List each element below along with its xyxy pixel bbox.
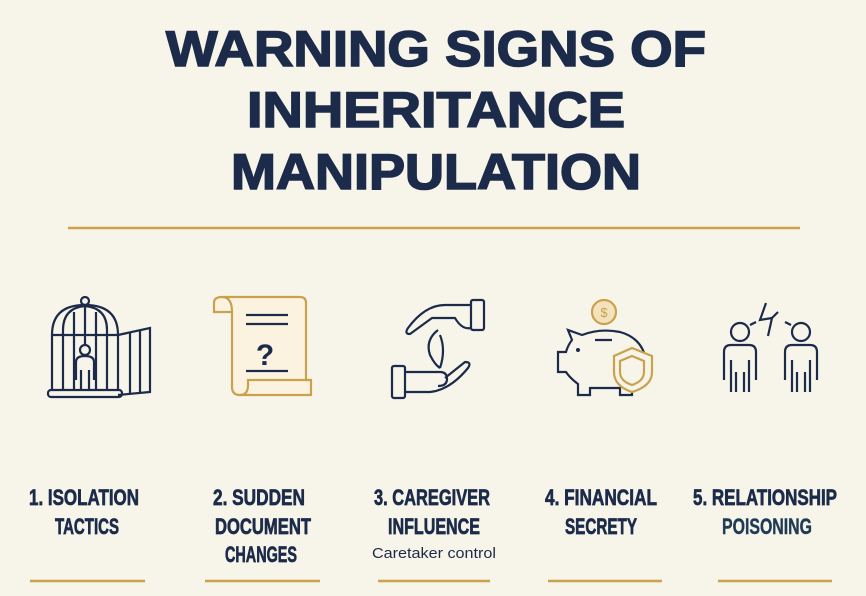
label 3: Caretaker control — [372, 545, 496, 562]
icon: scroll with question mark — [214, 297, 311, 395]
labels — [29, 485, 837, 567]
title: WARNING SIGNS OF — [166, 21, 706, 77]
label 4: 4. FINANCIAL — [545, 485, 657, 510]
label 5: POISONING — [722, 514, 812, 539]
label 2 — [213, 485, 311, 567]
icon: birdcage — [48, 297, 150, 397]
icon: hands exchanging — [392, 300, 484, 398]
label 2: 2. SUDDEN — [213, 485, 305, 510]
label 2: CHANGES — [225, 542, 297, 567]
label 3: INFLUENCE — [388, 514, 480, 539]
icon: piggy bank with shield — [558, 300, 652, 395]
label 2: DOCUMENT — [215, 514, 311, 539]
label 1: TACTICS — [55, 514, 119, 539]
label 3: 3. CAREGIVER — [374, 485, 490, 510]
label 3 — [372, 485, 496, 562]
icon: two people conflict — [724, 303, 817, 392]
title: INHERITANCE — [247, 82, 625, 138]
label 1 — [29, 485, 139, 539]
label 4: SECRETY — [565, 514, 637, 539]
label 4 — [545, 485, 657, 539]
icon: piggy bank with shield: $ — [600, 305, 608, 320]
icon: scroll with question mark: ? — [256, 339, 274, 372]
title — [166, 21, 706, 200]
title: MANIPULATION — [231, 144, 641, 200]
label 5 — [693, 485, 837, 539]
label 1: 1. ISOLATION — [29, 485, 139, 510]
